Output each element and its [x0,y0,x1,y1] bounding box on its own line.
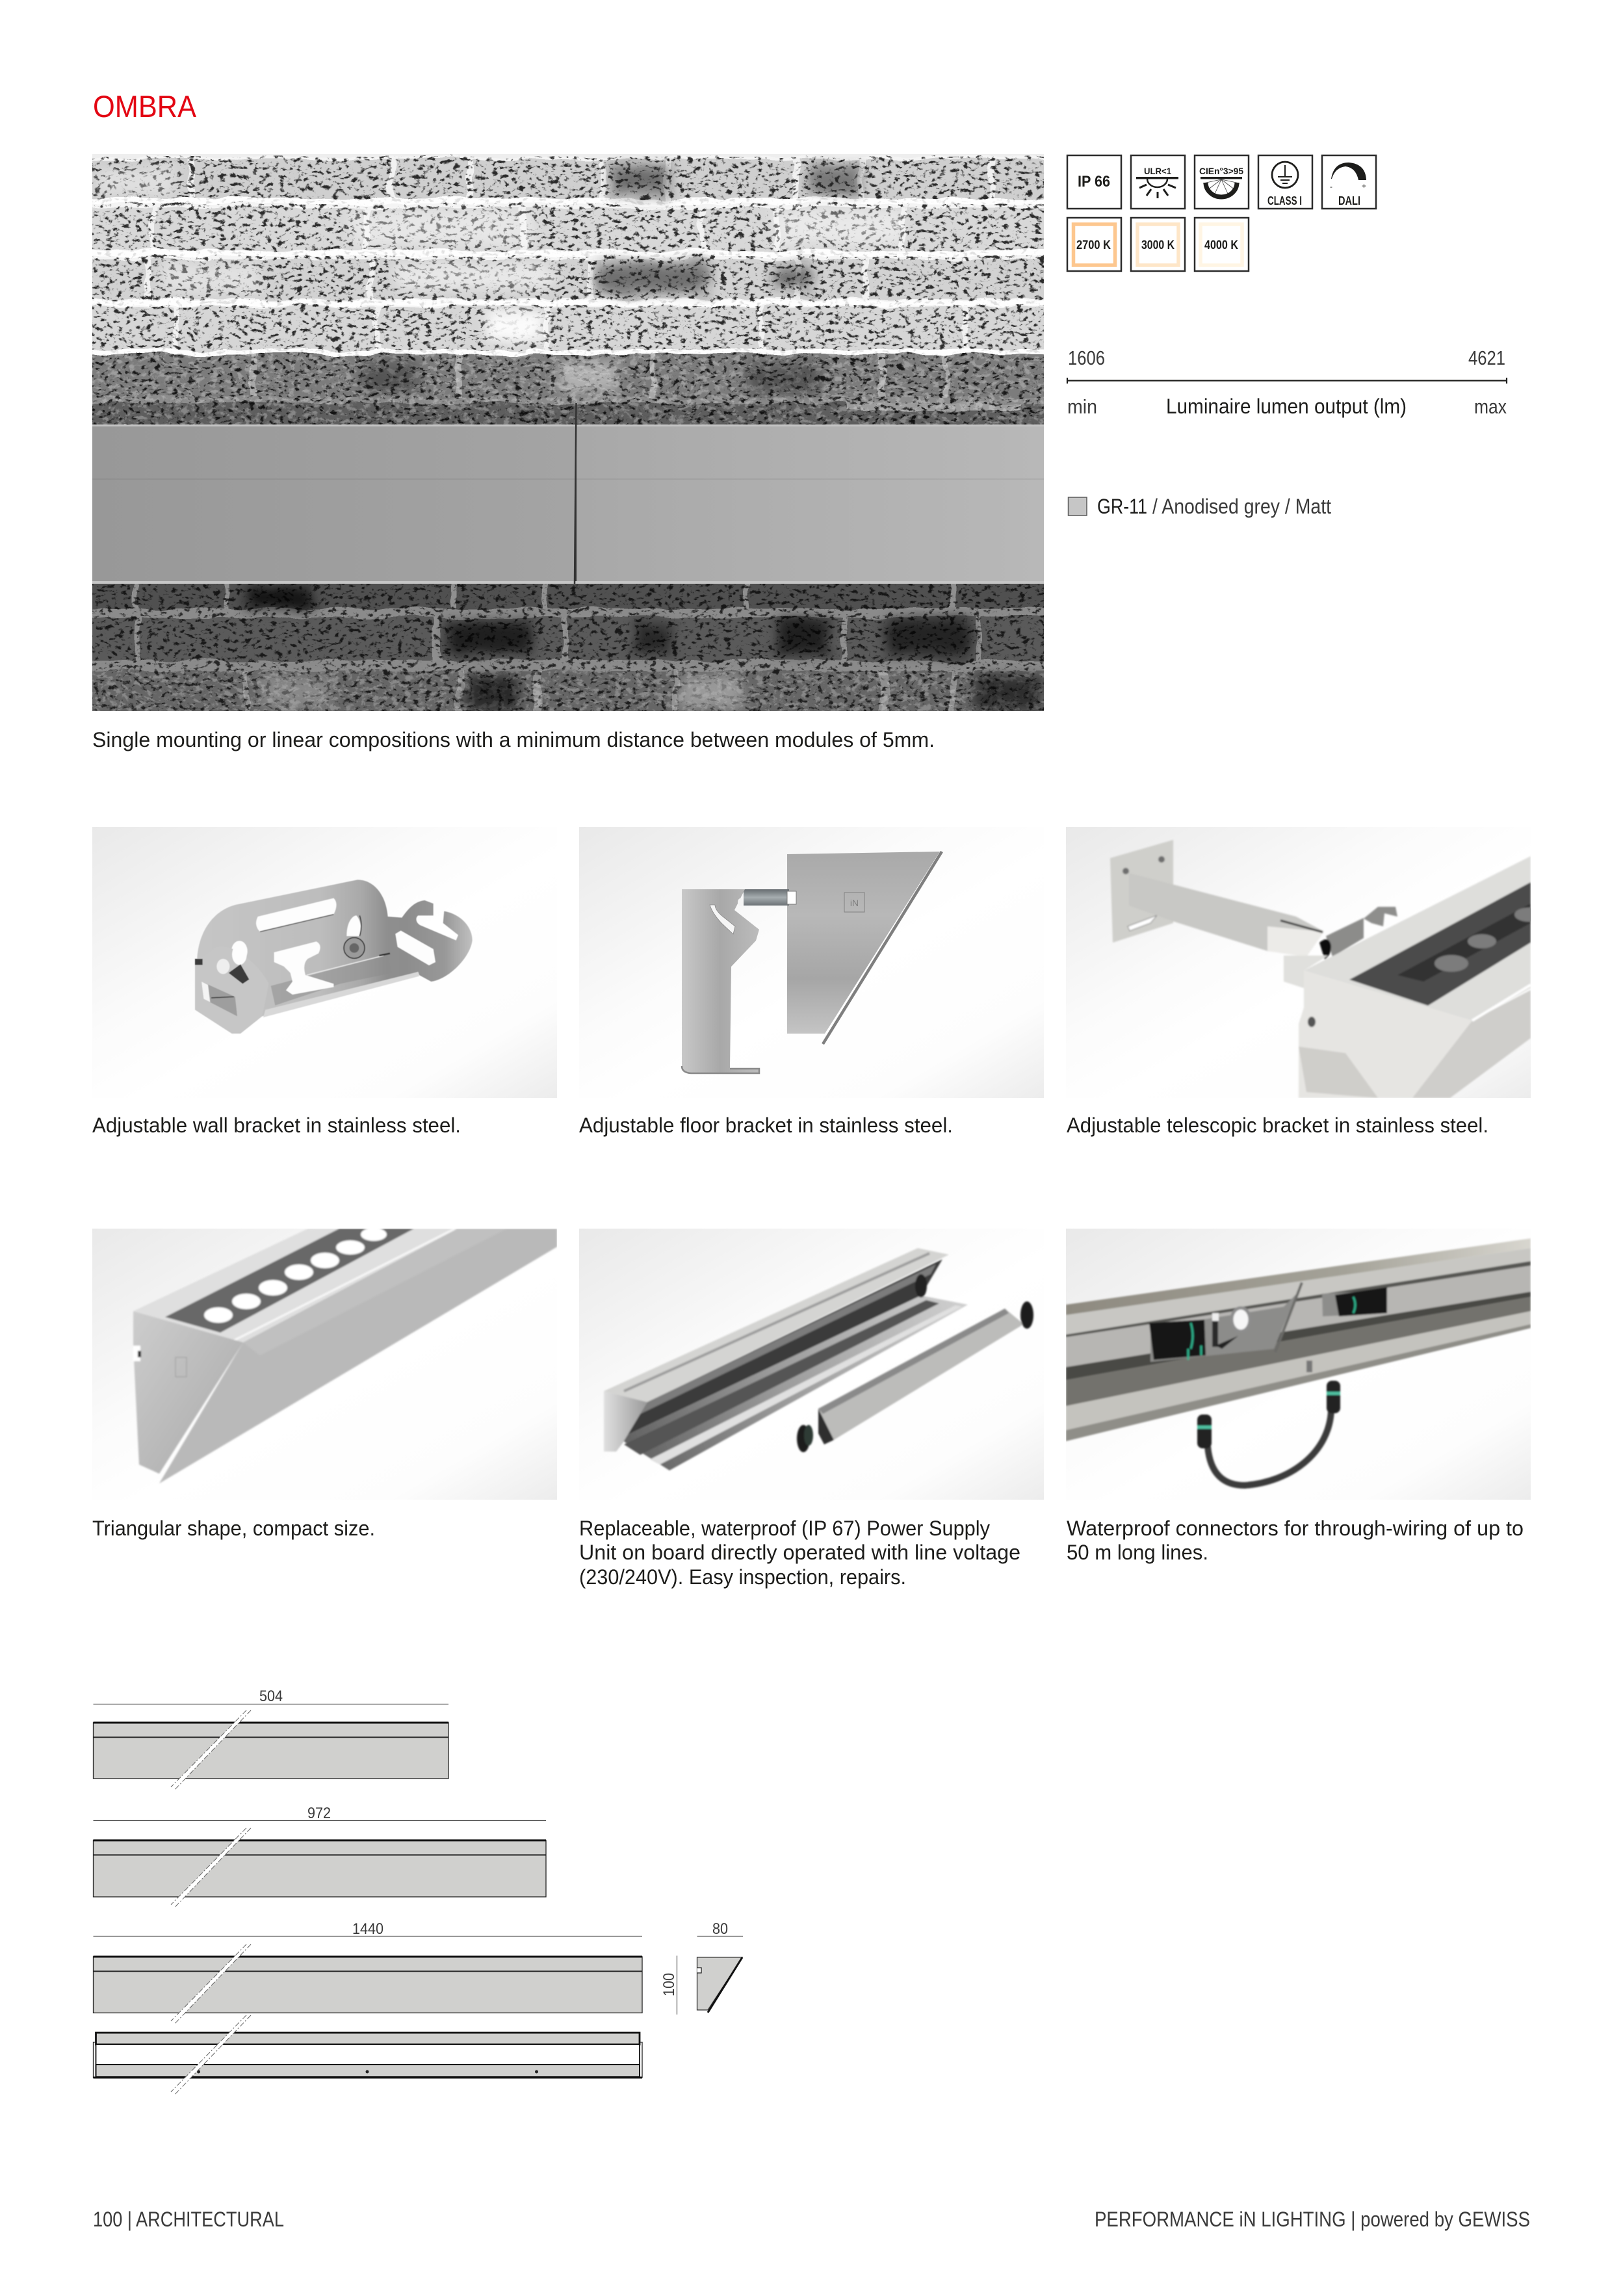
icon: floor bracket drawing: iN [850,898,859,908]
icon: CIE colour rendering [1195,155,1249,209]
panel: waterproof connectors [1066,1229,1531,1500]
finish: anodised grey swatch: / Anodised grey / Matt [1152,495,1331,518]
icon: DALI dimming: - [1330,182,1332,191]
photo: luminaire on brick wall [71,143,1066,723]
icon: ULR<1 [1131,155,1185,209]
icon: open luminaire body [604,1248,968,1470]
caption: power supply: Unit on board directly operated with line voltage [579,1541,1020,1564]
caption: connectors: 50 m long lines. [1067,1541,1208,1564]
icon: luminaire with LEDs [133,1228,557,1483]
grey luminaire band [92,403,1044,584]
icon: telescopic bracket drawing [1110,840,1543,1098]
finish: anodised grey swatch: GR-11 [1097,495,1147,518]
dimension drawing: section 80 x 100 [660,1920,743,2015]
brick wall upper [71,143,1066,427]
icon: ULR<1: ULR<1 [1144,166,1171,176]
lumen output scale: min [1067,395,1097,418]
caption: main photo: Single mounting or linear compositions with a minimum distance between modules of 5mm. [92,728,935,751]
caption: floor bracket: Adjustable floor bracket in stainless steel. [579,1114,953,1137]
caption: power supply: Replaceable, waterproof (IP 67) Power Supply [579,1517,990,1540]
icon: IP 66 [1067,155,1121,209]
dimension drawing: 504: 504 [259,1688,283,1705]
icon: floor bracket drawing [682,852,942,1073]
icon: 4000 K [1195,218,1249,271]
dimension drawing: section 80 x 100: 80 [712,1920,728,1938]
caption: connectors: Waterproof connectors for through-wiring of up to [1067,1517,1524,1540]
icons: feature badges [1067,155,1376,271]
footer: brand line: PERFORMANCE iN LIGHTING | powered by GEWISS [1095,2208,1530,2231]
dimension drawing: 504 [94,1688,448,1790]
panel: wall bracket [92,827,557,1098]
icon: power supply module [797,1301,1033,1452]
lumen output scale: Luminaire lumen output (lm) [1166,395,1407,418]
lumen output scale [1067,346,1507,418]
panel: power supply unit [579,1229,1044,1500]
icon: DALI dimming: + [1362,181,1366,190]
finish: anodised grey swatch [1069,495,1331,518]
footer: page label: 100 | ARCHITECTURAL [93,2208,284,2231]
icon: 3000 K [1131,218,1185,271]
tonal blotches: dark bricks and bright patches [97,166,903,393]
icon: 3000 K: 3000 K [1141,239,1175,252]
caption: triangular shape: Triangular shape, compact size. [92,1517,375,1540]
dimension drawing: section 80 x 100: 100 [660,1973,678,1996]
caption: wall bracket: Adjustable wall bracket in stainless steel. [92,1114,461,1137]
caption: telescopic bracket: Adjustable telescopic bracket in stainless steel. [1067,1114,1488,1137]
icon: IP 66: IP 66 [1078,173,1110,190]
caption: connectors [1067,1517,1524,1564]
icon: 2700 K [1067,218,1121,271]
caption: power supply: (230/240V). Easy inspection, repairs. [579,1565,906,1589]
icon: luminaire underside [1066,1238,1531,1441]
panel: triangular profile [92,1228,557,1500]
dimension drawing: 972 [94,1805,546,1908]
panel: floor bracket [579,827,1044,1098]
lumen output scale: 1606 [1068,346,1105,369]
icon: class I earth [1258,155,1312,209]
dimension drawing: 1440 front: 1440 [352,1920,383,1938]
brick wall lower [92,584,1044,711]
icon: class I earth: CLASS I [1267,194,1302,207]
icon: DALI dimming [1322,155,1376,209]
lumen output scale: max [1474,395,1507,418]
icon: DALI dimming: DALI [1338,194,1360,207]
title: OMBRA [93,89,197,124]
caption: power supply [579,1517,1020,1589]
panel: telescopic bracket [1066,827,1543,1098]
dimension drawing: 1440 back [94,2015,642,2095]
lumen output scale: 4621 [1468,346,1505,369]
icon: connector cable [1197,1381,1340,1485]
icon: 2700 K: 2700 K [1076,239,1111,252]
dimension drawing: 972: 972 [307,1805,331,1822]
dimension drawing: 1440 front [94,1920,642,2024]
icon: CIE colour rendering: CIEn°3>95 [1199,166,1243,176]
icon: 4000 K: 4000 K [1204,239,1238,252]
icon: wall bracket drawing [195,880,473,1034]
